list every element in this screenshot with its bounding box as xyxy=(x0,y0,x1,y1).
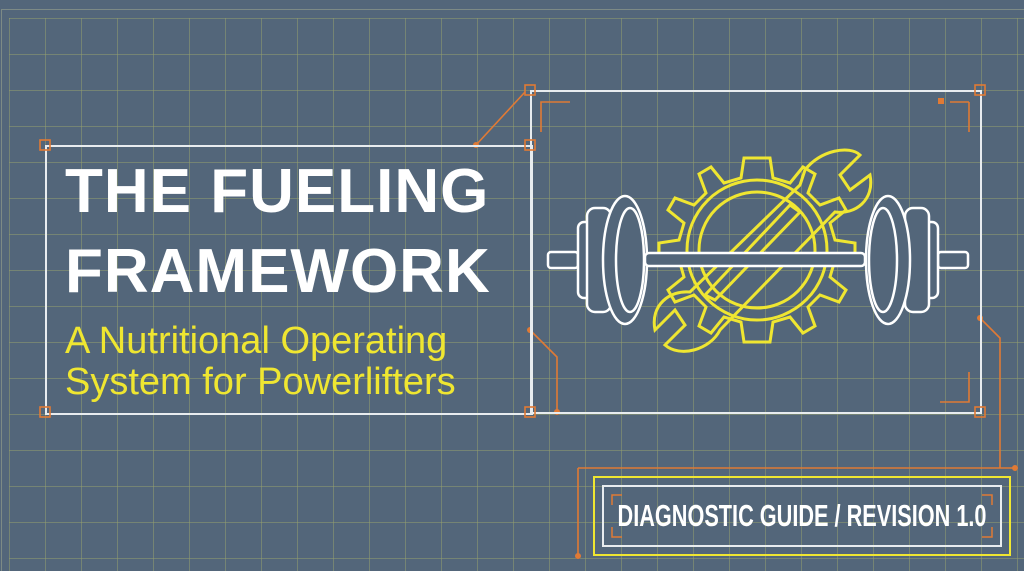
title: THE FUELING xyxy=(65,157,489,226)
panel: icon frame xyxy=(530,90,982,414)
subtitle xyxy=(65,320,456,403)
panel: title box xyxy=(45,145,533,415)
title xyxy=(65,157,491,306)
icon: barbell with gear and wrench xyxy=(546,148,970,353)
subtitle: System for Powerlifters xyxy=(65,361,456,403)
badge: diagnostic guide xyxy=(593,476,1011,556)
subtitle: A Nutritional Operating xyxy=(65,320,447,362)
title: FRAMEWORK xyxy=(65,237,491,306)
badge text: DIAGNOSTIC GUIDE / REVISION 1.0 xyxy=(618,498,986,533)
